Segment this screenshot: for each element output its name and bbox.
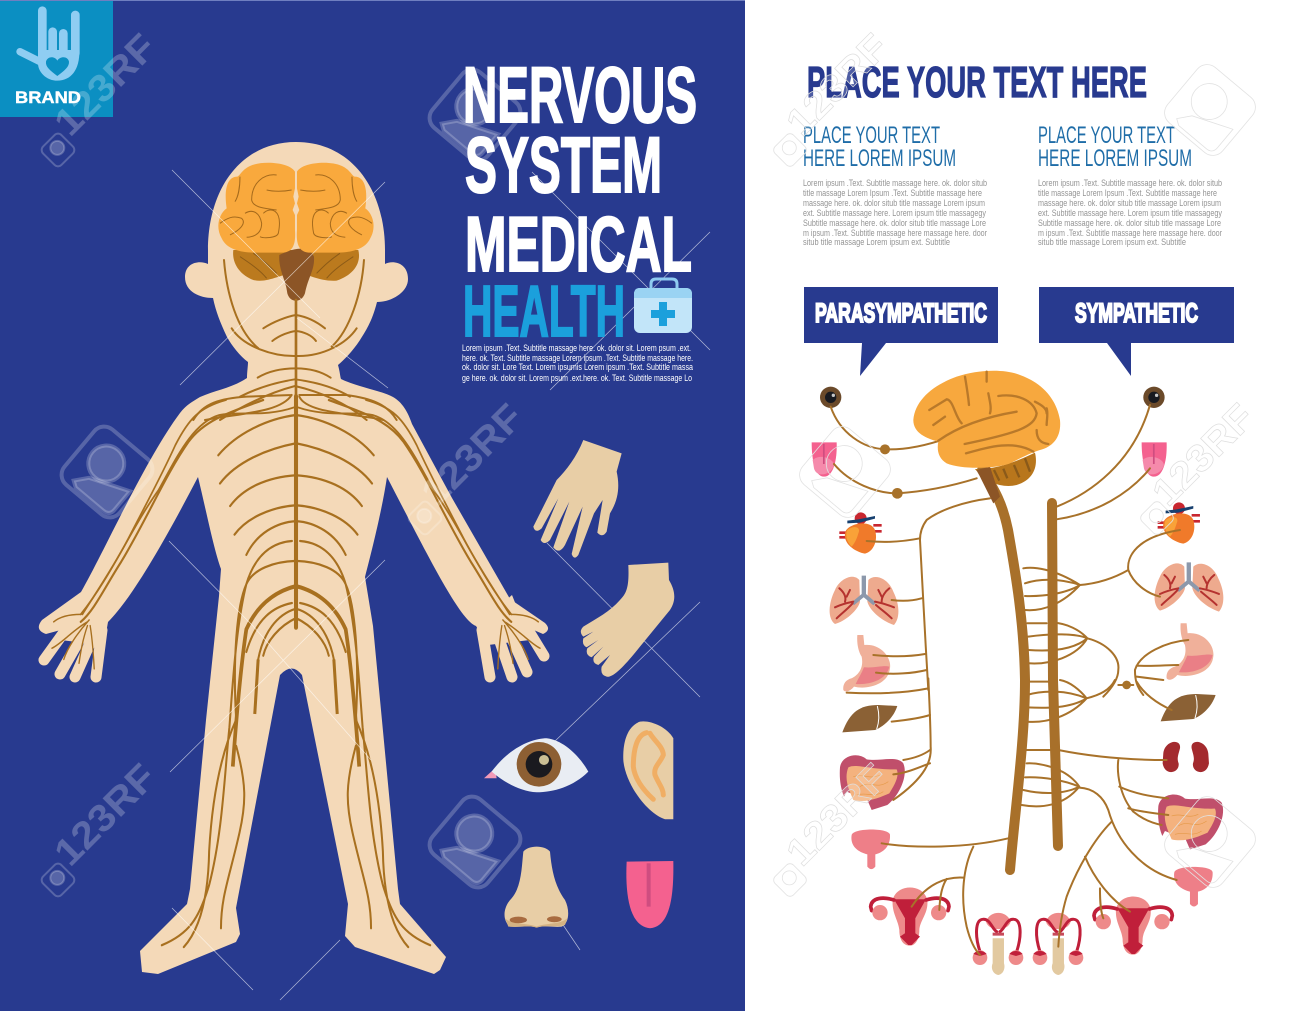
icon: lungs right xyxy=(1155,562,1223,612)
icon: kidneys xyxy=(1163,742,1209,772)
watermarks on blue panel: 123RF xyxy=(414,396,532,514)
cortex folds xyxy=(929,372,1048,453)
subheading xyxy=(803,122,956,172)
subheading: PLACE YOUR TEXT xyxy=(803,122,940,149)
brand label: BRAND xyxy=(15,89,81,107)
icon: heart left xyxy=(839,512,882,554)
upper organs xyxy=(812,387,1223,691)
autonomic nerve diagram xyxy=(812,371,1223,975)
body copy: ext. Subtitle massage here. Lorem ipsum title massagegy xyxy=(803,208,986,218)
nerves lower xyxy=(847,678,1177,955)
brainstem xyxy=(279,249,314,301)
brain side view xyxy=(913,371,1060,503)
watermarks on white panel: 123RF xyxy=(779,26,897,144)
text column right xyxy=(1038,122,1222,247)
icon: first aid kit xyxy=(634,279,692,333)
subheading: HERE LOREM IPSUM xyxy=(803,145,956,172)
body copy: Subtitle massage here. ok. dolor situb title massage Lore xyxy=(803,218,986,228)
body copy: Subtitle massage here. ok. dolor situb title massage Lore xyxy=(1038,218,1221,228)
icon: liver right xyxy=(1161,694,1216,721)
body copy: m ipsum .Text. Subtitle massage here massage here. door xyxy=(803,228,987,238)
panel: blue poster background xyxy=(0,0,745,1011)
icon: love hand sign xyxy=(20,11,79,81)
icon: eye right xyxy=(1143,387,1165,408)
icon: stomach right xyxy=(1167,623,1213,680)
watermarks on white panel xyxy=(772,26,1263,898)
icon: male reproductive right xyxy=(1033,913,1083,975)
body figure with nerves xyxy=(39,142,548,974)
sense organs and body parts xyxy=(484,440,674,928)
body copy xyxy=(1038,178,1222,247)
cerebrum left xyxy=(218,163,295,253)
diagonal watermark hairlines on blue panel xyxy=(169,170,710,1000)
intro text: Lorem ipsum .Text. Subtitle massage here. ok. dolor sit. Lorem psum .ext. xyxy=(462,343,691,353)
cerebellum xyxy=(233,250,359,281)
icon: male reproductive left xyxy=(973,913,1023,975)
callout: parasympathetic: PARASYMPATHETIC xyxy=(815,298,987,328)
nerves head and neck xyxy=(193,260,397,420)
body copy: ext. Subtitle massage here. Lorem ipsum title massagegy xyxy=(1038,208,1222,218)
body copy xyxy=(803,178,987,247)
watermarks on blue panel: 123RF xyxy=(47,756,165,874)
icon: bladder right xyxy=(1174,867,1213,906)
subheading: HERE LOREM IPSUM xyxy=(1038,145,1192,172)
body copy: massage here. ok. dolor situb title massage Lorem ipsum xyxy=(803,198,985,208)
cerebrum xyxy=(913,371,1060,468)
intro text: here. ok. Text. Subtitle massage Lorem ipsum .Text. Subtitle massage here. xyxy=(462,353,693,363)
title block xyxy=(462,50,697,383)
watermarks on blue panel: 123RF xyxy=(47,26,165,144)
icon: liver left xyxy=(842,705,897,732)
intro text: ge here. ok. dolor sit. Lorem psum .ext.here. ok. Text. Subtitle massage Lo xyxy=(462,373,692,383)
icon: lungs left xyxy=(830,576,898,625)
watermarks on blue panel xyxy=(40,26,532,898)
icon: eye left xyxy=(820,387,841,408)
nerves trunk, arms and legs xyxy=(52,396,540,947)
icon: intestine right xyxy=(1158,795,1223,849)
icon: ear xyxy=(623,721,673,819)
intro text: ok. dolor sit. Lore Text. Lorem ipsumis Lorem ipsum .Text. Subtitle massa xyxy=(462,362,693,372)
icon: tongue right xyxy=(1142,442,1167,477)
callout: sympathetic: SYMPATHETIC xyxy=(1075,298,1198,328)
icon: hand xyxy=(533,440,622,558)
lower organs xyxy=(840,694,1223,975)
icon: tongue xyxy=(626,861,673,928)
title: medical: MEDICAL xyxy=(465,200,692,288)
brand badge xyxy=(0,1,113,117)
icon: uterus right xyxy=(1094,896,1172,955)
icon: foot xyxy=(581,563,674,677)
cerebrum right xyxy=(297,163,374,253)
icon: eye xyxy=(484,738,588,792)
icon: heart right xyxy=(1158,502,1200,544)
intro text xyxy=(462,343,693,383)
sympathetic trunk xyxy=(1052,503,1058,846)
body copy: title massage Lorem Ipsum .Text. Subtitle massage here xyxy=(803,188,982,198)
title: system: SYSTEM xyxy=(465,120,662,209)
watermarks on white panel: 123RF xyxy=(1145,396,1263,514)
cerebrum folds right xyxy=(300,175,372,238)
icon: uterus left xyxy=(871,887,949,946)
callout: sympathetic xyxy=(1039,287,1234,376)
body copy: massage here. ok. dolor situb title massage Lorem ipsum xyxy=(1038,198,1221,208)
icon: intestine left xyxy=(840,755,905,810)
body copy: situb title massage Lorem ipsum ext. Subtitle xyxy=(803,237,950,247)
cerebellum xyxy=(975,453,1036,503)
icon: bladder left xyxy=(851,829,890,869)
icon: stomach left xyxy=(843,635,890,691)
subheading xyxy=(1038,122,1192,172)
panel: white page background xyxy=(745,0,1300,1011)
body copy: m ipsum .Text. Subtitle massage here massage here. door xyxy=(1038,228,1222,238)
cerebrum folds xyxy=(220,175,292,238)
body copy: title massage Lorem Ipsum .Text. Subtitle massage here xyxy=(1038,188,1217,198)
text column left xyxy=(803,122,987,247)
body silhouette xyxy=(39,142,548,974)
brain front view xyxy=(218,163,374,301)
nerves upper xyxy=(831,405,1188,697)
spinal cord xyxy=(982,470,1025,870)
body copy: situb title massage Lorem ipsum ext. Subtitle xyxy=(1038,237,1186,247)
watermarks on white panel: 123RF xyxy=(779,756,897,874)
icon: nose xyxy=(505,847,568,928)
body copy: Lorem ipsum .Text. Subtitle massage here. ok. dolor situb xyxy=(803,178,987,188)
callout: parasympathetic xyxy=(804,287,998,376)
body copy: Lorem ipsum .Text. Subtitle massage here. ok. dolor situb xyxy=(1038,178,1222,188)
icon: tongue left xyxy=(812,442,837,477)
title: health: HEALTH xyxy=(463,272,625,352)
title: nervous: NERVOUS xyxy=(463,50,697,139)
subheading: PLACE YOUR TEXT xyxy=(1038,122,1175,149)
